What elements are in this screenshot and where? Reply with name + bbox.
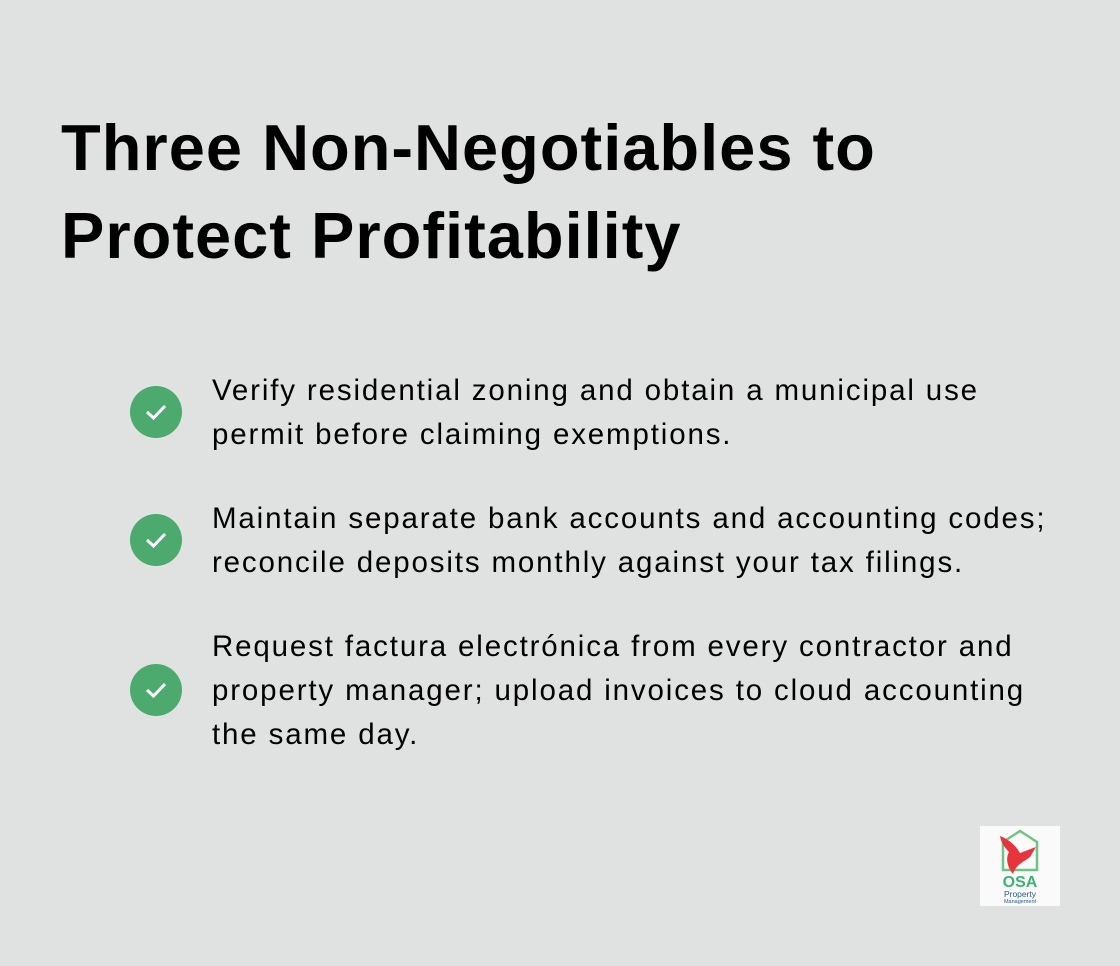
- logo: Management: [1004, 899, 1037, 905]
- icon: check 2: [130, 514, 182, 566]
- icon: check 1: [130, 386, 182, 438]
- item 3: [130, 630, 1025, 751]
- icon: check 3: [130, 664, 182, 716]
- item 2: [130, 502, 1046, 579]
- text 1: [212, 374, 979, 451]
- text 3: property manager; upload invoices to cloud accounting: [212, 674, 1025, 707]
- logo: Property: [1004, 889, 1037, 899]
- text 3: the same day.: [212, 718, 419, 751]
- text 3: Request factura electrónica from every contractor and: [212, 630, 1013, 663]
- title: [61, 111, 876, 272]
- logo: [980, 826, 1060, 906]
- text 3: [212, 630, 1025, 751]
- text 1: Verify residential zoning and obtain a municipal use: [212, 374, 979, 407]
- title: Three Non-Negotiables to: [61, 111, 876, 184]
- text 2: Maintain separate bank accounts and accounting codes;: [212, 502, 1046, 535]
- logo: OSA: [1003, 874, 1038, 891]
- text 2: reconcile deposits monthly against your tax filings.: [212, 546, 964, 579]
- text 2: [212, 502, 1046, 579]
- item 1: [130, 374, 979, 451]
- title: Protect Profitability: [61, 199, 682, 272]
- text 1: permit before claiming exemptions.: [212, 418, 732, 451]
